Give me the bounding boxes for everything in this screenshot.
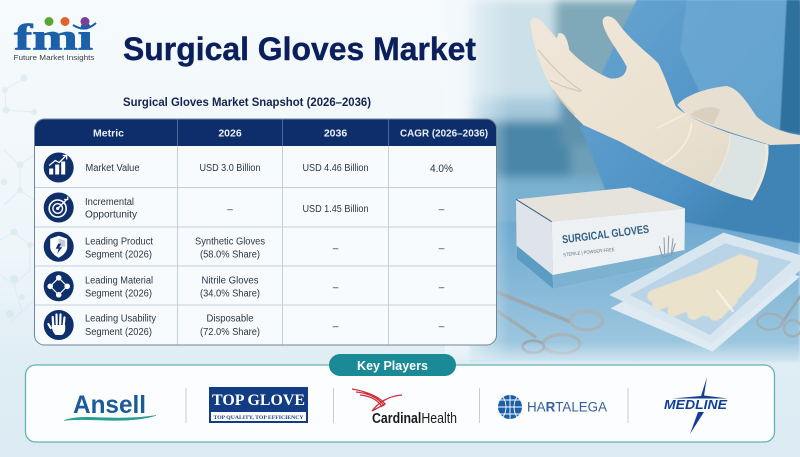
surgeon gown — [580, 0, 800, 243]
surgical scissors — [498, 293, 800, 353]
icon: shield — [44, 232, 74, 262]
row: leading product segment — [44, 232, 445, 262]
row: leading material segment: Leading Material — [85, 275, 153, 286]
icon: target — [44, 192, 74, 222]
logo: Medline — [664, 377, 728, 434]
row: market value: USD 4.46 Billion — [302, 163, 368, 174]
row: leading usability segment — [44, 310, 445, 340]
photo fades — [445, 0, 510, 360]
row: market value: 4.0% — [430, 163, 453, 175]
row: leading product segment: Leading Product — [85, 236, 153, 247]
row: incremental opportunity: Incremental — [85, 197, 134, 208]
logo: Cardinal Health — [352, 389, 457, 427]
logo: Top Glove: TOP QUALITY, TOP EFFICIENCY — [214, 415, 304, 421]
row: incremental opportunity: USD 1.45 Billion — [302, 204, 368, 215]
glove box — [516, 187, 685, 289]
row: leading usability segment: Leading Usability — [85, 314, 156, 325]
main gloved hand — [530, 16, 769, 200]
row: incremental opportunity: – — [439, 204, 445, 216]
row: incremental opportunity: Opportunity — [85, 210, 137, 221]
row: leading material segment — [44, 271, 445, 301]
key players heading pill — [329, 354, 456, 376]
row: leading product segment: Synthetic Gloves — [195, 236, 265, 247]
row: leading usability segment: Disposable — [206, 314, 254, 325]
table header row: 2036 — [324, 128, 347, 140]
box label: SURGICAL GLOVES — [562, 224, 650, 246]
table subtitle: Surgical Gloves Market Snapshot (2026–2036) — [123, 95, 371, 109]
row: leading product segment: Segment (2026) — [85, 250, 152, 261]
row: market value — [44, 152, 453, 182]
row: leading material segment: – — [439, 282, 445, 294]
panel: key players — [26, 354, 774, 442]
logo: Top Glove: TOP GLOVE — [212, 392, 305, 409]
blue table cloth — [470, 222, 800, 362]
table header row: CAGR (2026–2036) — [400, 128, 488, 140]
row: leading product segment: (58.0% Share) — [200, 250, 260, 261]
key players heading pill: Key Players — [357, 359, 428, 373]
decorative molecule pattern — [0, 74, 37, 322]
row: incremental opportunity — [44, 192, 445, 222]
logo letters: fmi — [14, 18, 93, 58]
row: leading usability segment: – — [439, 322, 445, 332]
logo: Top Glove — [209, 387, 308, 423]
row: leading product segment: – — [333, 244, 339, 254]
blurred room background — [470, 0, 800, 240]
table header row: Metric — [93, 128, 124, 140]
logo: Future Market Insights — [14, 17, 96, 62]
table header row: 2026 — [218, 128, 242, 140]
row: leading usability segment: (72.0% Share) — [200, 327, 260, 338]
row: market value: Market Value — [86, 163, 140, 174]
row: leading usability segment: – — [333, 322, 339, 332]
icon: rising bar chart — [44, 152, 74, 182]
title: Surgical Gloves Market — [123, 31, 476, 67]
row: leading material segment: – — [333, 282, 339, 294]
row: market value: USD 3.0 Billion — [200, 163, 260, 174]
logo: Hartalega: HARTALEGA — [527, 400, 607, 414]
icon: connected nodes — [44, 271, 74, 301]
row: incremental opportunity: – — [227, 204, 233, 216]
row: leading material segment: Segment (2026) — [85, 289, 152, 300]
sealed glove packets — [609, 233, 800, 352]
row: leading product segment: – — [439, 244, 445, 254]
photo: surgeon putting on gloves — [440, 0, 800, 457]
row: leading material segment: (34.0% Share) — [200, 289, 260, 300]
logo: Hartalega — [498, 395, 607, 419]
second hand — [677, 86, 800, 145]
icon: raised hand — [44, 310, 74, 340]
logo: Medline: MEDLINE — [664, 398, 728, 412]
table header row — [93, 128, 488, 140]
row: leading usability segment: Segment (2026) — [85, 327, 152, 338]
logo: Future Market Insights: Future Market Insights — [14, 53, 95, 62]
row: leading material segment: Nitrile Gloves — [202, 275, 258, 286]
logo: Ansell: Ansell — [73, 391, 146, 419]
logo: Cardinal Health: CardinalHealth — [372, 411, 457, 427]
glove box: STERILE | POWDER-FREE — [563, 247, 615, 257]
snapshot table — [34, 118, 498, 345]
